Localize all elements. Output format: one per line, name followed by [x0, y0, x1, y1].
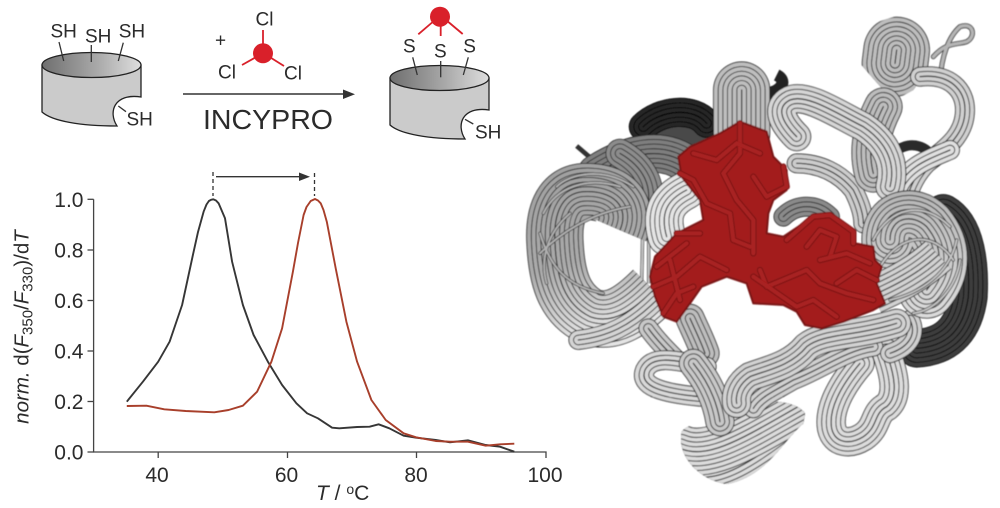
- y axis title: )/d: [10, 243, 34, 267]
- strands joining right coil to loop: [890, 320, 912, 353]
- bicyclic product: S: [434, 42, 447, 63]
- black curve: unmodified peptide: [127, 199, 514, 452]
- starting cyclic peptide: [42, 21, 153, 131]
- reaction arrow: [183, 90, 355, 99]
- right descending band: [907, 76, 965, 200]
- y axis title: T: [10, 229, 34, 243]
- lower right loop: [831, 353, 894, 442]
- descending tube bundle: [693, 363, 720, 422]
- trichloro linker reagent: Cl: [256, 9, 273, 30]
- lower left strands: [648, 328, 677, 360]
- starting cyclic peptide: SH: [126, 110, 153, 131]
- bottom blob: [680, 400, 810, 477]
- central white coil: [664, 190, 687, 237]
- y axis title: 330: [20, 267, 36, 292]
- right descending band, lower: [897, 150, 950, 190]
- strands behind ligand: [900, 145, 932, 157]
- lower left strands, second bundle: [690, 318, 705, 353]
- y axis title: norm. d(F: [10, 335, 34, 424]
- left loop: [555, 192, 653, 319]
- x tick labels: [145, 464, 563, 487]
- second wavy ribbon: [753, 347, 873, 408]
- bicyclic product: SH: [475, 122, 501, 143]
- bicyclic product: [390, 7, 501, 143]
- y tick labels: 0.8: [54, 240, 84, 262]
- x tick labels: 40: [145, 464, 169, 487]
- starting cyclic peptide: SH: [85, 27, 111, 48]
- dark right helix: [917, 213, 969, 348]
- starting cyclic peptide: SH: [119, 21, 145, 42]
- x axis title: C: [354, 482, 369, 505]
- starting cyclic peptide: SH: [50, 21, 77, 42]
- gray cluster behind ligand: [783, 207, 830, 217]
- trichloro linker reagent: Cl: [218, 63, 236, 84]
- dark top patch: [577, 107, 712, 167]
- x tick labels: 60: [275, 464, 298, 487]
- light strand behind ligand: [797, 163, 863, 223]
- x tick labels: 80: [404, 464, 428, 487]
- INCYPRO label: INCYPRO: [203, 104, 333, 135]
- upper mid ribbon: [782, 99, 892, 187]
- axes: [88, 199, 546, 458]
- crossing strands on right coil: [873, 210, 960, 313]
- single loop strand, top right: [933, 26, 972, 80]
- protein structure ensemble: [540, 26, 972, 477]
- crossing strands on left loop: [540, 174, 633, 293]
- melting curve chart: [10, 172, 563, 505]
- y tick labels: [54, 189, 84, 464]
- bicyclic product: S: [403, 37, 416, 58]
- bicyclic product: S: [463, 37, 476, 58]
- red ligand sticks: [650, 122, 885, 328]
- reaction scheme: [42, 7, 501, 143]
- vertical linking strands: [642, 233, 649, 283]
- trichloro linker reagent: [215, 9, 302, 84]
- y axis title: /: [10, 304, 34, 310]
- trichloro linker reagent: +: [215, 30, 226, 52]
- top centre bundle: [741, 90, 743, 133]
- right coil diagonal strands: [873, 255, 938, 295]
- gray strands descending from dark helix: [620, 153, 649, 210]
- y tick labels: 0.0: [54, 442, 84, 464]
- dark gray strands behind top: [597, 154, 690, 173]
- black top helix: [643, 112, 707, 127]
- dashed peak markers and shift arrow: [213, 172, 314, 196]
- y tick labels: 0.6: [54, 290, 84, 313]
- left loop tail: [578, 300, 657, 340]
- y tick labels: 0.4: [54, 340, 84, 364]
- x axis title: T /: [316, 482, 340, 505]
- red curve: bicyclic peptide: [127, 199, 514, 446]
- top centre bundle end: [768, 75, 782, 93]
- y tick labels: 1.0: [54, 189, 84, 212]
- upper mid helix: [871, 107, 883, 173]
- right coil: [890, 219, 939, 290]
- trichloro linker reagent: Cl: [284, 63, 302, 84]
- lower left loop: [644, 360, 707, 397]
- y axis title: F: [10, 290, 34, 304]
- y tick labels: 0.2: [54, 391, 84, 414]
- wavy ribbon: [736, 323, 897, 403]
- upper right helix: [895, 50, 897, 63]
- x axis title: o: [346, 481, 354, 497]
- x tick labels: 100: [527, 464, 563, 487]
- y axis title: 350: [20, 310, 36, 335]
